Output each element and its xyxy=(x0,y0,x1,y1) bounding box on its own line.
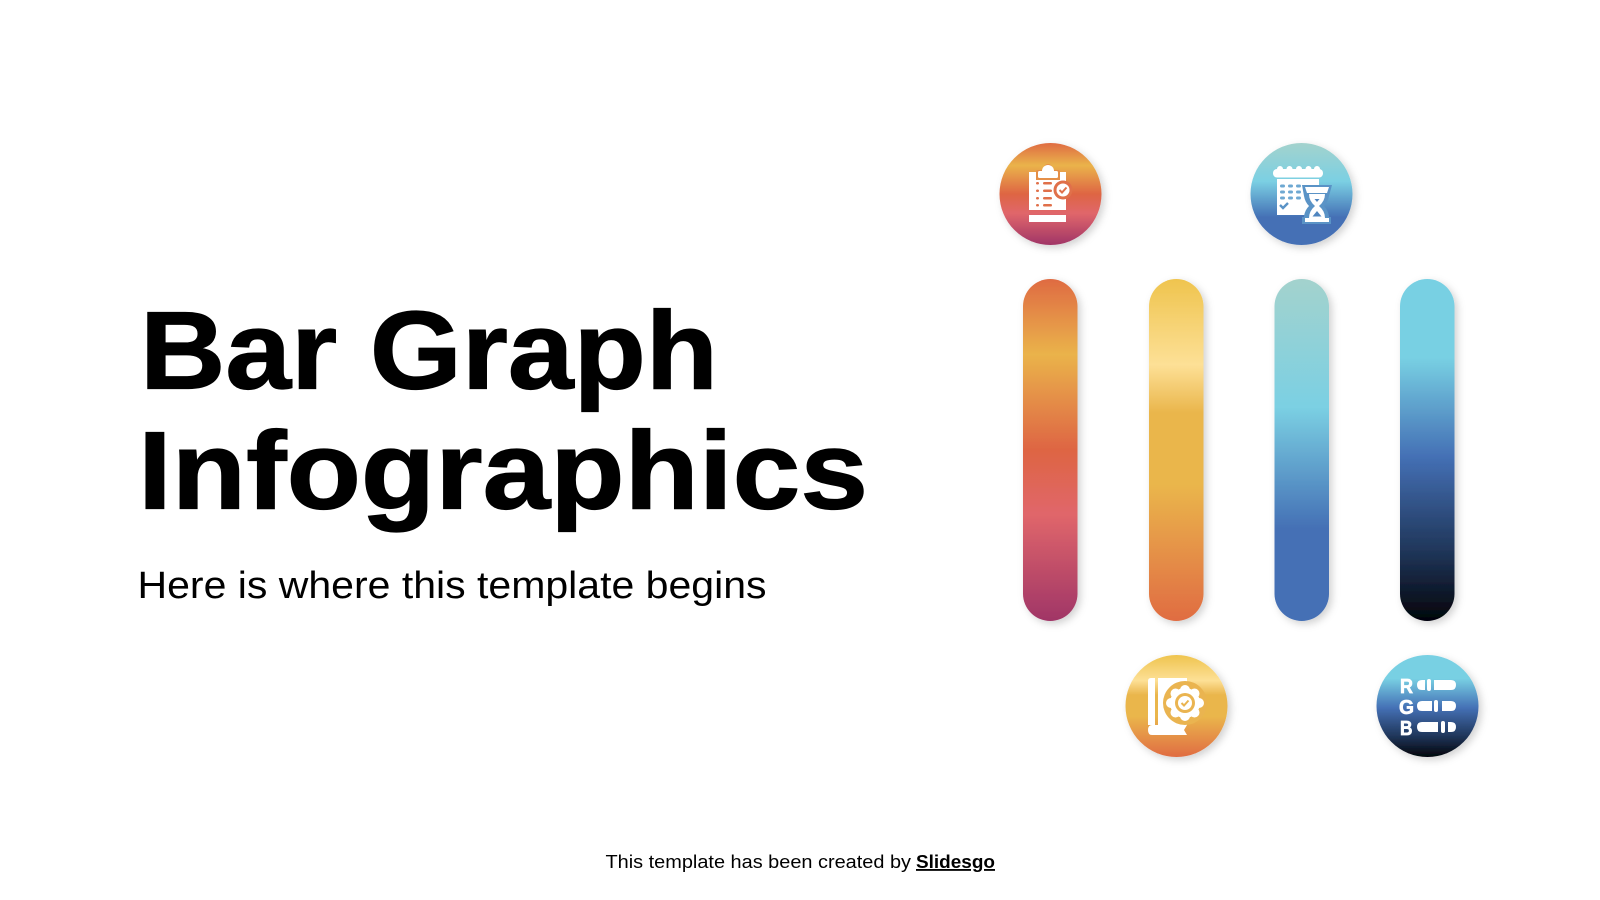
bar 2 xyxy=(1149,279,1204,621)
icon: RGB sliders xyxy=(1376,655,1478,757)
icon: book with gear xyxy=(1126,655,1228,757)
footer credit: Slidesgo xyxy=(916,851,995,872)
title: Infographics xyxy=(138,410,868,532)
title: Bar Graph xyxy=(140,290,718,412)
bar 1 xyxy=(1023,279,1078,621)
bar 3 xyxy=(1274,279,1329,621)
subtitle: Here is where this template begins xyxy=(138,565,766,607)
title xyxy=(138,290,868,532)
footer credit: This template has been created by xyxy=(606,851,912,872)
icon: calendar with hourglass xyxy=(1250,143,1352,245)
icon: RGB sliders: B xyxy=(1400,718,1412,740)
hourglass cut-out xyxy=(1302,185,1332,224)
icon: RGB sliders: G xyxy=(1399,697,1414,719)
icon: RGB sliders: R xyxy=(1400,676,1413,698)
icon: clipboard checklist xyxy=(1000,143,1102,245)
bar 4 xyxy=(1400,279,1454,621)
